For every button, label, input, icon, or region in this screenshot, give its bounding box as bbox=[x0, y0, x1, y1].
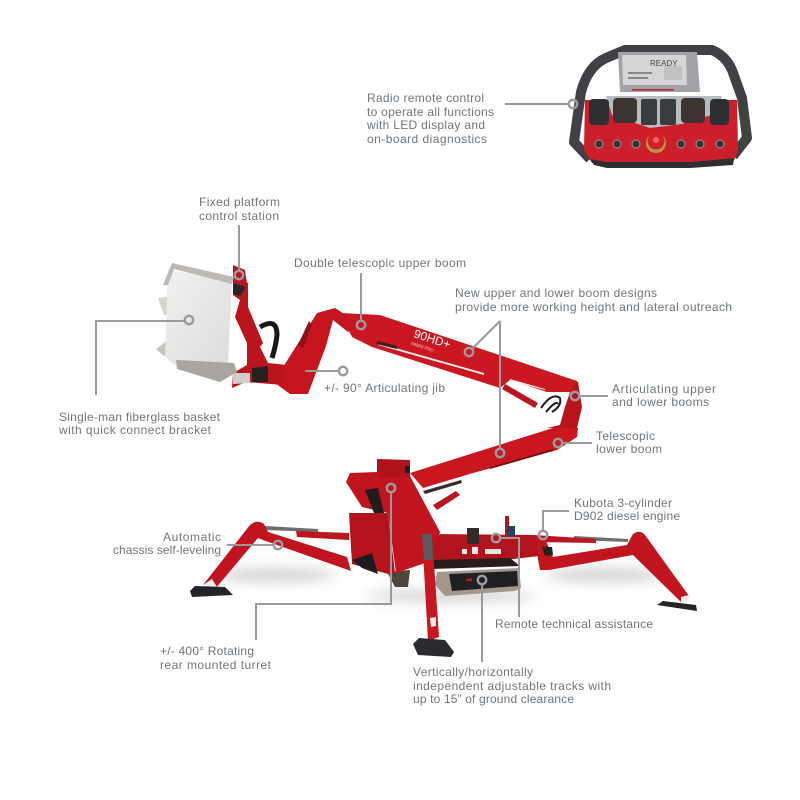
callout: single-man fiberglass basket: Single-man fiberglass basket bbox=[59, 410, 221, 424]
chassis bbox=[430, 516, 539, 569]
remote: bottom bumper bbox=[590, 158, 734, 168]
callout: telescopic lower boom bbox=[554, 429, 662, 456]
remote: LED display: READY bbox=[650, 59, 678, 68]
callout: fixed platform control station bbox=[199, 195, 280, 279]
callout: remote technical assistance bbox=[492, 534, 653, 631]
callout: single-man fiberglass basket bbox=[58, 316, 221, 437]
callout: articulating upper and lower booms bbox=[571, 382, 716, 409]
turret bbox=[346, 459, 440, 574]
callout: adjustable tracks: Vertically/horizontally bbox=[413, 665, 533, 679]
hoses bbox=[541, 396, 560, 412]
callout: adjustable tracks: independent adjustable tracks with bbox=[413, 679, 611, 693]
callout: automatic chassis self-leveling: chassis self-leveling bbox=[113, 543, 221, 557]
platform jib arm bbox=[232, 265, 287, 388]
remote: red body bbox=[584, 100, 738, 163]
callout: articulating jib: +/- 90° Articulating jib bbox=[324, 381, 445, 395]
callout: articulating jib bbox=[305, 367, 445, 395]
radio remote control illustration bbox=[574, 50, 747, 168]
callout: upper and lower boom designs: New upper and lower boom designs bbox=[455, 286, 657, 300]
callout: adjustable tracks: up to 15” of ground clearance bbox=[413, 692, 574, 706]
callout: rotating rear mounted turret: +/- 400° Rotating bbox=[160, 644, 254, 658]
callout: telescopic lower boom: lower boom bbox=[596, 442, 662, 456]
remote: LED display bbox=[618, 52, 700, 92]
callout: fixed platform control station: control station bbox=[199, 209, 279, 223]
boom model label: A9800 PRO bbox=[410, 341, 435, 353]
articulating jib link bbox=[275, 308, 358, 394]
callout: Kubota engine: Kubota 3-cylinder bbox=[574, 496, 672, 510]
callout: radio remote control: with LED display and bbox=[366, 118, 485, 132]
remote: grey panel bbox=[606, 96, 722, 128]
callout: Kubota engine: D902 diesel engine bbox=[574, 509, 680, 523]
callout: upper and lower boom designs: provide more working height and lateral outreach bbox=[455, 300, 732, 314]
callout: double telescopic upper boom bbox=[294, 256, 466, 329]
callout: remote technical assistance: Remote technical assistance bbox=[495, 617, 653, 631]
callout: automatic chassis self-leveling: Automatic bbox=[163, 530, 221, 544]
callout: rotating rear mounted turret: rear mounted turret bbox=[160, 658, 272, 672]
boom model label: 90HD+ bbox=[412, 327, 452, 351]
callout: fixed platform control station: Fixed platform bbox=[199, 195, 280, 209]
remote: control levers bbox=[589, 98, 729, 125]
callout: radio remote control: Radio remote control bbox=[367, 91, 484, 105]
rear track bbox=[387, 570, 410, 587]
boom head joint bbox=[547, 380, 582, 428]
callout: telescopic lower boom: Telescopic bbox=[596, 429, 655, 443]
callout: radio remote control: on-board diagnostics bbox=[367, 132, 487, 146]
left outrigger bbox=[190, 522, 351, 597]
callout: automatic chassis self-leveling bbox=[113, 530, 282, 557]
callout: double telescopic upper boom: Double telescopic upper boom bbox=[294, 256, 466, 270]
callout: radio remote control bbox=[366, 91, 577, 146]
remote: carry handle bbox=[574, 50, 747, 159]
crawler track bbox=[435, 568, 521, 596]
callout: articulating upper and lower booms: and lower booms bbox=[612, 395, 709, 409]
fibreglass basket bbox=[156, 263, 237, 382]
remote: toggle switches bbox=[595, 140, 724, 148]
callout: adjustable tracks bbox=[413, 576, 611, 706]
remote: emergency stop button bbox=[646, 132, 666, 153]
hydraulic cylinder bbox=[502, 384, 538, 408]
callout: rotating rear mounted turret bbox=[160, 484, 395, 672]
ground shadow bbox=[215, 568, 665, 602]
right outrigger bbox=[534, 532, 697, 611]
callout: single-man fiberglass basket: with quick connect bracket bbox=[58, 423, 212, 437]
machine: spider lift bbox=[156, 263, 697, 657]
telescopic lower boom bbox=[410, 428, 578, 510]
callout: radio remote control: to operate all functions bbox=[367, 105, 494, 119]
front stabiliser leg bbox=[413, 534, 454, 657]
callout: articulating upper and lower booms: Articulating upper bbox=[612, 382, 716, 396]
upper boom bbox=[340, 313, 577, 392]
callout: upper and lower boom designs bbox=[455, 286, 732, 457]
callout: Kubota engine bbox=[539, 496, 680, 539]
